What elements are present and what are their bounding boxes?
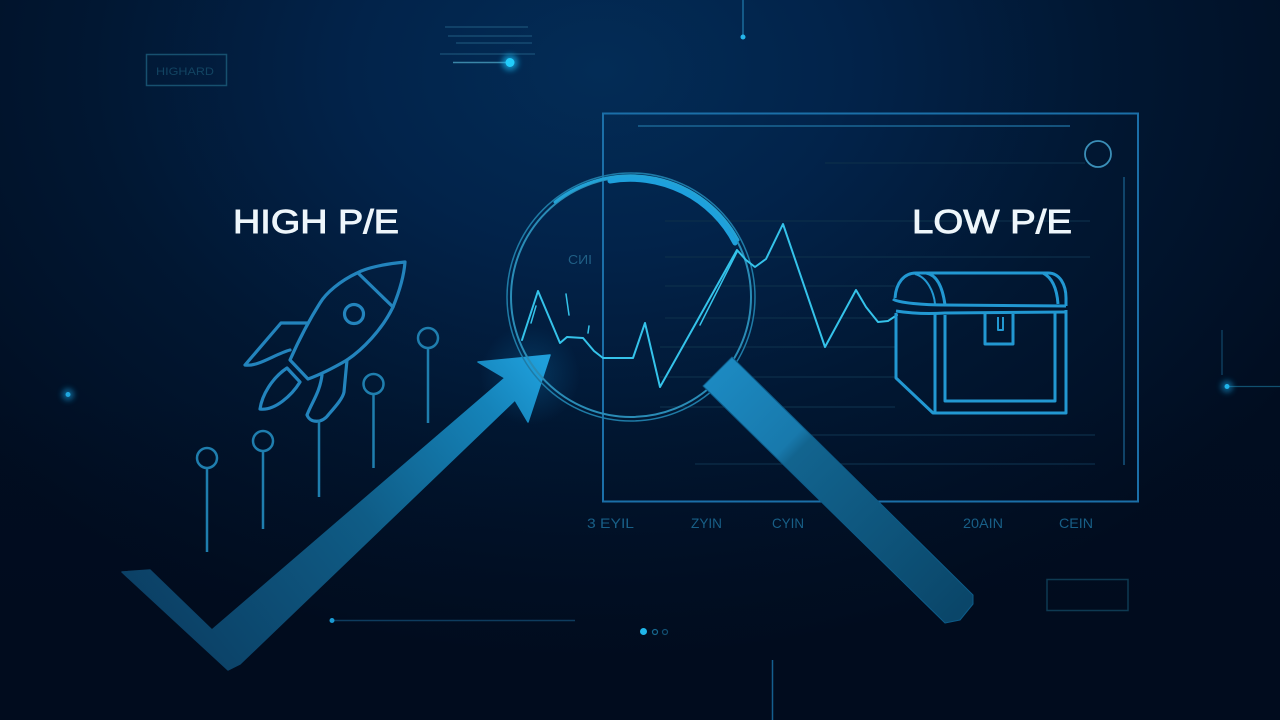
- line chart: [522, 224, 897, 387]
- decorative HUD: bottom-right box: [1047, 580, 1128, 610]
- decorative HUD: bottom vertical line: [772, 660, 774, 720]
- panel: chart frame: [603, 114, 1138, 502]
- icon: treasure chest: [893, 273, 1066, 413]
- icon: pins rising: [197, 328, 438, 552]
- decorative HUD: top lines with glowing node: [440, 27, 535, 70]
- magnifier inset label: СИI: [568, 252, 592, 267]
- decorative HUD: bottom line with node: [330, 618, 575, 623]
- magnifying glass: [507, 173, 973, 623]
- icon: rocket: [245, 262, 405, 421]
- x-axis labels: [587, 515, 1093, 531]
- decorative HUD: bottom dots: [640, 628, 668, 635]
- heading: low P/E: LOW P/E: [912, 203, 1072, 240]
- decorative HUD: right node and lines: [1221, 330, 1280, 392]
- decorative HUD: top-left label box: [146, 54, 226, 86]
- x-axis labels: 3 EYIL: [587, 515, 634, 531]
- decorative HUD: top vertical line with node: [740, 0, 746, 40]
- decorative HUD: top-left label box: HIGHARD: [156, 66, 214, 78]
- arrow: rising check mark: [122, 325, 580, 670]
- x-axis labels: CYIN: [772, 515, 804, 531]
- heading: high P/E: HIGH P/E: [233, 203, 399, 240]
- magnifier handle: [703, 357, 973, 623]
- x-axis labels: CEIN: [1059, 515, 1093, 531]
- x-axis labels: ZYIN: [691, 515, 722, 531]
- decorative node: left: [62, 388, 74, 400]
- x-axis labels: 20AIN: [963, 515, 1003, 531]
